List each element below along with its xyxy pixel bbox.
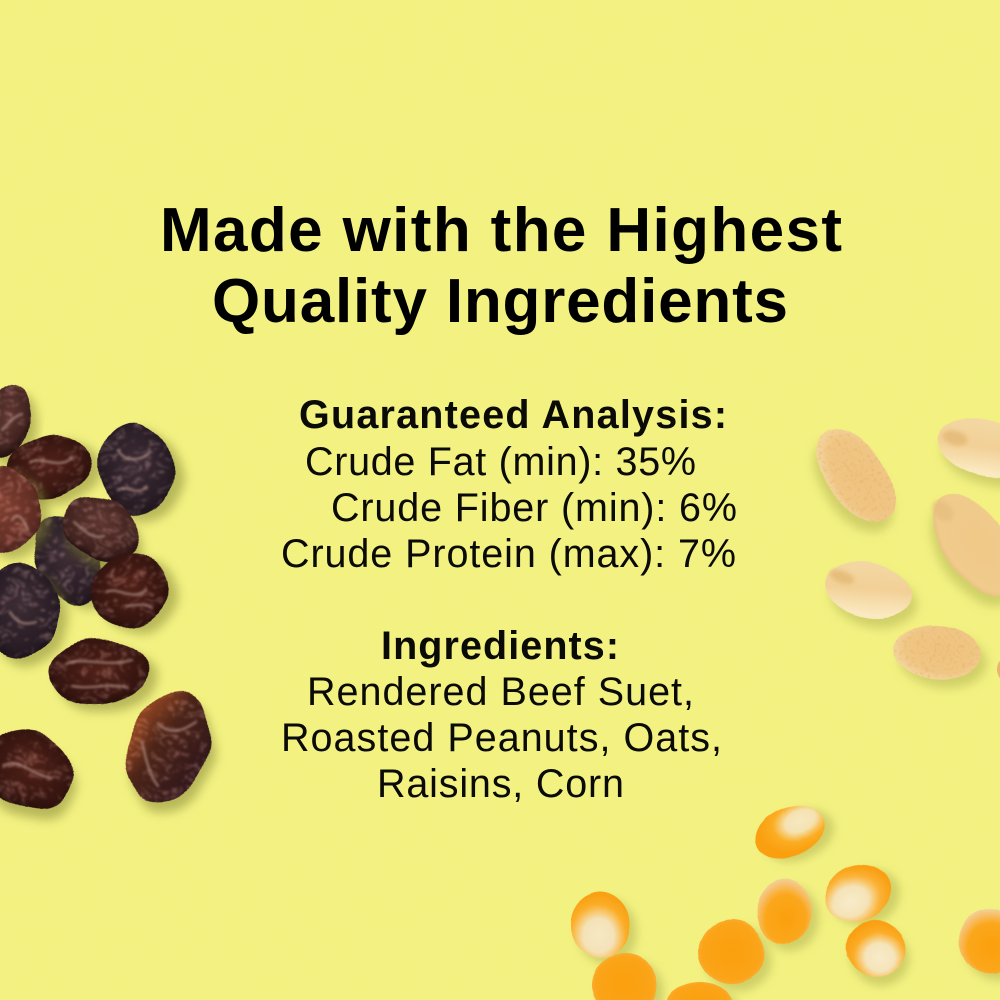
ingredients text block [281, 624, 722, 806]
title: Made with the Highest [160, 196, 842, 265]
ingredients text block: Rendered Beef Suet, [307, 670, 694, 714]
guaranteed analysis text block [281, 393, 737, 576]
corn kernels [570, 795, 1000, 1000]
peanuts [802, 409, 1000, 683]
guaranteed analysis text block: Crude Fiber (min): 6% [331, 486, 737, 530]
ingredients text block: Roasted Peanuts, Oats, [281, 716, 722, 760]
guaranteed analysis text block: Guaranteed Analysis: [299, 393, 727, 437]
title [160, 196, 842, 336]
guaranteed analysis text block: Crude Protein (max): 7% [281, 532, 736, 576]
title: Quality Ingredients [212, 267, 788, 336]
raisins cluster [0, 383, 225, 826]
ingredients text block: Raisins, Corn [377, 762, 624, 806]
raisin glossy highlights [2, 414, 196, 786]
guaranteed analysis text block: Crude Fat (min): 35% [305, 440, 696, 484]
ingredients text block: Ingredients: [381, 624, 619, 668]
